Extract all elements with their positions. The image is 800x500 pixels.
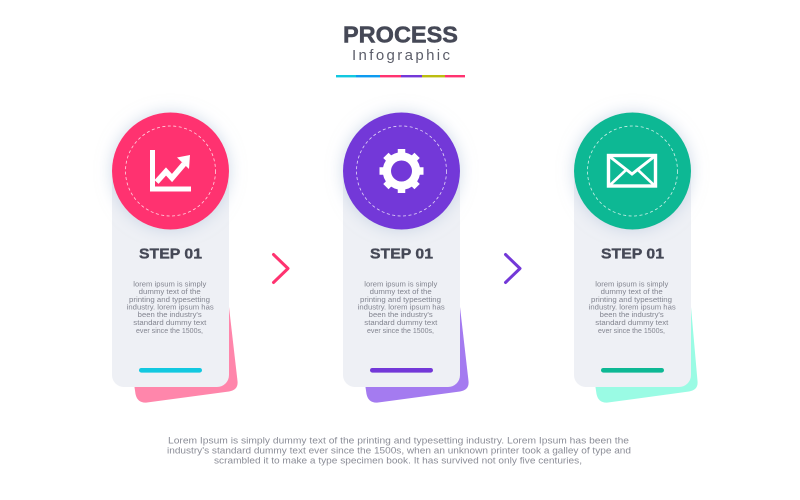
circle badge xyxy=(574,112,691,230)
panel: step 1 xyxy=(112,112,238,403)
text block: been the industry's xyxy=(600,312,664,319)
title: Infographic xyxy=(352,47,450,64)
text block: industry. lorem ipsum has xyxy=(589,304,676,312)
footer text: industry's standard dummy text ever since the 1500s, when an unknown printer took a galley of type and xyxy=(167,445,631,455)
card body xyxy=(112,170,229,387)
text block: printing and typesetting xyxy=(591,297,672,304)
circle badge xyxy=(112,112,229,230)
footer text xyxy=(167,435,631,465)
footer text: Lorem Ipsum is simply dummy text of the printing and typesetting industry. Lorem Ipsum has been the xyxy=(168,435,629,445)
heading: STEP 01 xyxy=(601,246,664,262)
text block xyxy=(589,282,676,335)
text block: printing and typesetting xyxy=(129,297,210,304)
text block: ever since the 1500s, xyxy=(136,328,203,335)
arrow: step 1 to step 2 xyxy=(274,254,288,282)
text block xyxy=(358,282,445,335)
text block: ever since the 1500s, xyxy=(598,328,665,335)
text block: industry. lorem ipsum has xyxy=(358,304,445,312)
text block: ever since the 1500s, xyxy=(367,328,434,335)
back card: pink xyxy=(132,300,238,403)
heading: STEP 01 xyxy=(370,246,433,262)
text block: standard dummy text xyxy=(595,320,668,327)
heading: STEP 01 xyxy=(139,246,202,262)
footer text: scrambled it to make a type specimen book. It has survived not only five centuries, xyxy=(214,455,582,465)
panel: step 3 xyxy=(574,112,698,403)
text block: been the industry's xyxy=(138,312,202,319)
arrow: step 2 to step 3 xyxy=(506,254,520,282)
panel: step 2 xyxy=(343,112,469,403)
card body xyxy=(574,170,691,387)
card body xyxy=(343,170,460,387)
title underline xyxy=(336,75,465,77)
text block: dummy text of the xyxy=(370,289,432,296)
dashed ring xyxy=(356,126,446,216)
text block: industry. lorem ipsum has xyxy=(127,304,214,312)
text block: been the industry's xyxy=(369,312,433,319)
accent bar xyxy=(601,368,664,373)
text block: lorem ipsum is simply xyxy=(364,282,438,288)
icon: gear xyxy=(380,149,424,193)
back card: mint xyxy=(593,300,698,403)
text block: printing and typesetting xyxy=(360,297,441,304)
icon: envelope xyxy=(608,156,656,186)
icon: growth chart xyxy=(150,150,191,192)
accent bar xyxy=(139,368,202,373)
title xyxy=(343,22,458,64)
text block: lorem ipsum is simply xyxy=(595,282,669,288)
dashed ring xyxy=(126,126,216,216)
text block: dummy text of the xyxy=(601,289,663,296)
text block: standard dummy text xyxy=(133,320,206,327)
back card: purple xyxy=(363,300,469,403)
circle badge xyxy=(343,112,460,230)
text block: standard dummy text xyxy=(364,320,437,327)
text block xyxy=(127,282,214,335)
title: PROCESS xyxy=(343,22,458,48)
accent bar xyxy=(370,368,433,373)
text block: dummy text of the xyxy=(139,289,201,296)
text block: lorem ipsum is simply xyxy=(133,282,207,288)
dashed ring xyxy=(588,126,678,216)
